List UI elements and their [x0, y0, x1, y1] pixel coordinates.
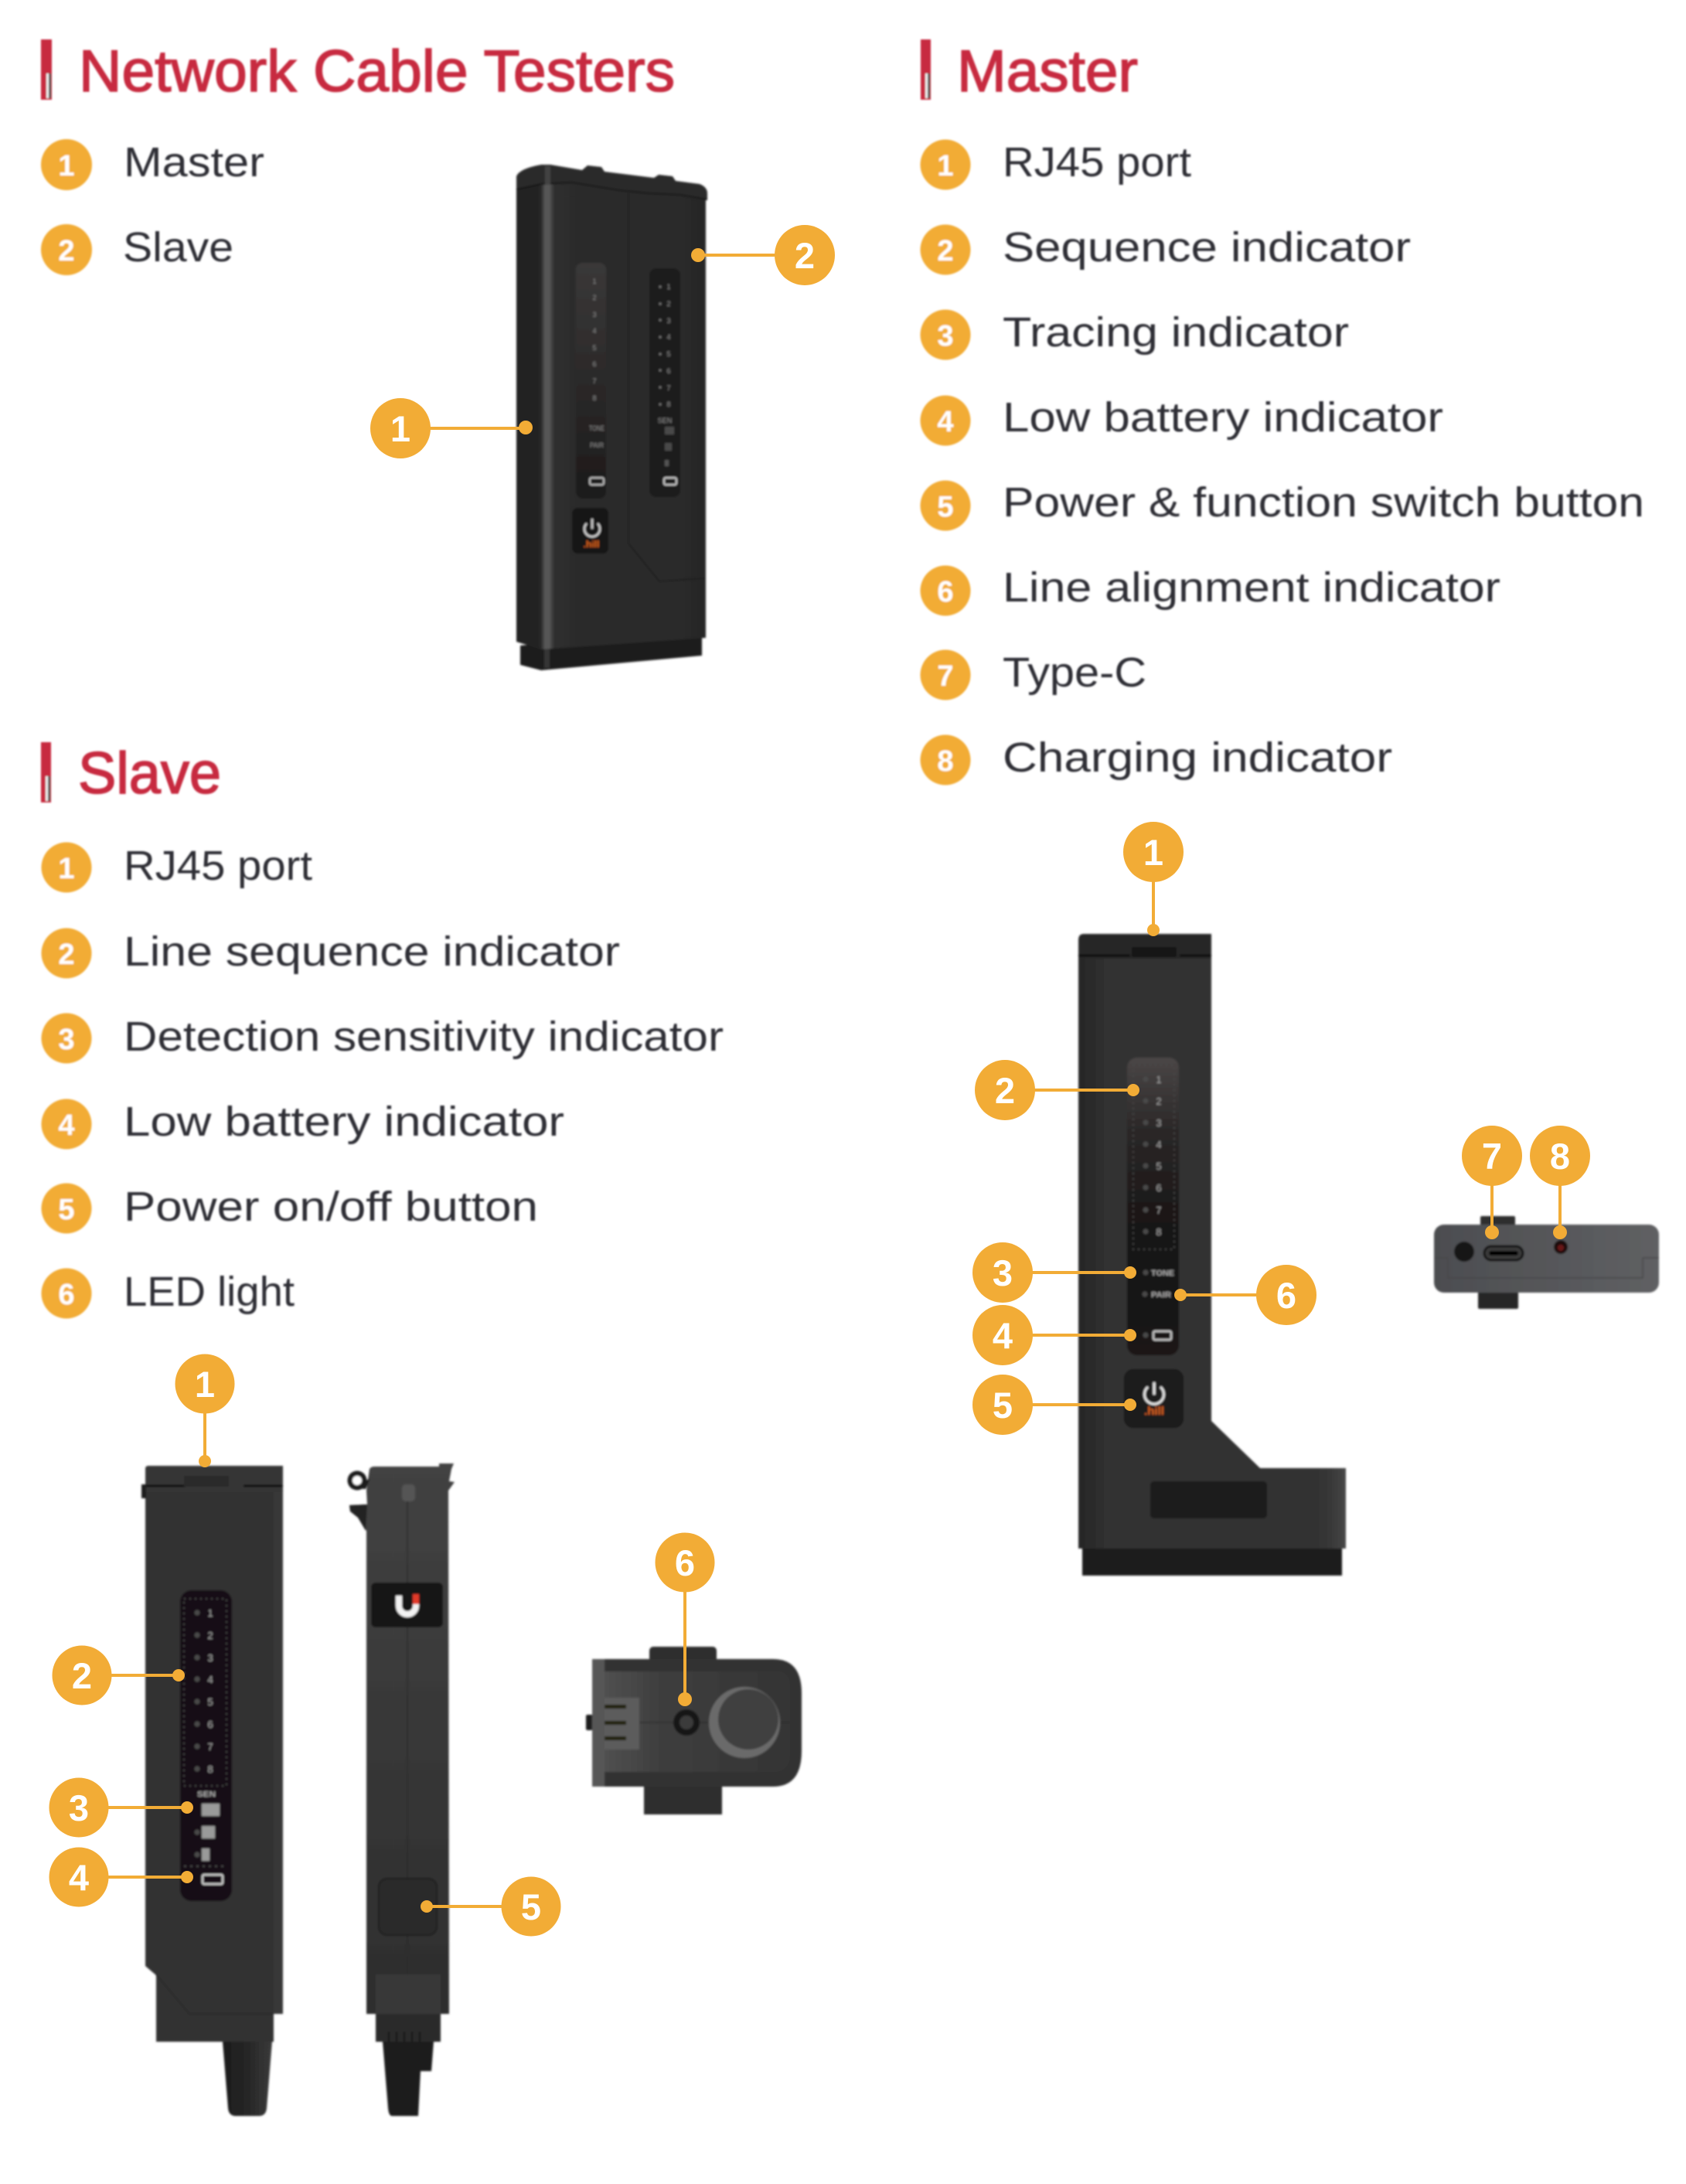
display: slave indicators: 3 — [666, 317, 671, 325]
callout: master 1 RJ45 port: 1 — [1143, 832, 1163, 873]
list: master parts: 4 — [937, 406, 954, 438]
list: slave parts: Power on/off button — [124, 1184, 538, 1230]
callout: master 3 tracing indicator: 3 — [993, 1252, 1013, 1293]
display: slave indicators: 1 — [207, 1607, 213, 1619]
callout: master 5 power button — [972, 1375, 1136, 1435]
display: master indicators: PAIR — [590, 441, 604, 449]
callout: master 6 line alignment indicator: 6 — [1276, 1275, 1296, 1316]
list: master parts: 8 — [937, 745, 954, 778]
display: line sequence panel: 8 — [1156, 1226, 1162, 1238]
display: slave indicators: 1 — [666, 283, 671, 291]
display: slave indicators: 6 — [207, 1719, 213, 1730]
callout: slave 6 LED light: 6 — [675, 1542, 695, 1583]
display: slave indicators: 2 — [207, 1630, 213, 1641]
display: line sequence panel: 2 — [1156, 1095, 1162, 1107]
heading: Master: Master — [957, 39, 1138, 104]
power and function button — [1125, 1370, 1183, 1427]
callout: 1 master on product: 1 — [390, 408, 410, 449]
device: master and slave docked together — [516, 165, 707, 670]
callout: slave 4 low battery indicator: 4 — [69, 1857, 89, 1898]
callout: master 4 low battery indicator: 4 — [993, 1315, 1013, 1356]
power button — [572, 508, 608, 554]
list: slave parts: 4 — [58, 1109, 75, 1142]
device: slave front view — [141, 1466, 283, 2116]
display: line sequence panel: 7 — [1156, 1204, 1162, 1216]
list: master parts: Power & function switch button — [1003, 479, 1644, 526]
list: product parts: 2 — [58, 235, 75, 267]
display: slave indicators: 8 — [666, 400, 671, 408]
callout: slave 3 detection sensitivity indicator — [49, 1778, 193, 1837]
callout: slave 1 RJ45 port — [175, 1354, 235, 1467]
list: slave parts: 2 — [58, 939, 75, 971]
list: slave parts: LED light — [124, 1269, 295, 1315]
list: master parts: Tracing indicator — [1003, 309, 1349, 356]
heading: Network Cable Testers: Network Cable Testers — [79, 39, 675, 104]
list: master parts: RJ45 port — [1003, 139, 1191, 186]
list: master parts: 3 — [937, 320, 954, 353]
callout: 2 slave on product: 2 — [795, 235, 815, 276]
device: slave side view — [348, 1463, 455, 2116]
display: line sequence panel: 6 — [1156, 1182, 1162, 1194]
display: slave indicators — [180, 1590, 232, 1901]
device: slave end view — [586, 1647, 802, 1814]
display: master indicators: TONE — [589, 424, 605, 432]
list: product parts: 1 — [58, 150, 75, 182]
list: product parts: Master — [124, 139, 264, 186]
list: master parts: 2 — [937, 235, 954, 267]
display: line sequence panel: 5 — [1156, 1160, 1162, 1172]
power and function button: .hill — [1144, 1405, 1164, 1418]
callout: slave 2 line sequence indicator: 2 — [72, 1655, 92, 1696]
display: master indicators: 5 — [592, 344, 597, 352]
list: master parts: Type-C — [1003, 649, 1146, 696]
device: master end view — [1434, 1216, 1659, 1309]
display: master indicators: 2 — [592, 294, 597, 302]
list: slave parts: Detection sensitivity indicator — [124, 1014, 724, 1060]
list: master parts: Sequence indicator — [1003, 224, 1411, 271]
display: line sequence panel: PAIR — [1151, 1291, 1172, 1300]
display: master indicators — [576, 263, 606, 499]
device: master front view — [1078, 934, 1346, 1576]
callout: master 6 line alignment indicator — [1174, 1265, 1316, 1325]
display: slave indicators: 6 — [666, 367, 671, 375]
callout: master 1 RJ45 port — [1123, 822, 1184, 936]
display: slave indicators — [649, 268, 680, 497]
list: master parts: 6 — [937, 576, 954, 608]
display: slave indicators: 5 — [207, 1696, 213, 1708]
display: slave indicators: 4 — [207, 1674, 213, 1685]
display: slave indicators: 4 — [666, 333, 671, 341]
heading: Slave: Slave — [78, 741, 221, 806]
display: master indicators: 6 — [592, 360, 597, 368]
callout: 2 slave on product — [691, 225, 835, 285]
callout: slave 4 low battery indicator — [49, 1848, 193, 1906]
display: master indicators: 7 — [592, 377, 597, 385]
list: master parts: 7 — [937, 660, 954, 693]
callout: slave 1 RJ45 port: 1 — [195, 1364, 215, 1405]
callout: slave 5 power button: 5 — [521, 1886, 541, 1927]
list: slave parts: 1 — [58, 853, 75, 885]
list: master parts: Line alignment indicator — [1003, 564, 1500, 611]
display: line sequence panel: 1 — [1156, 1074, 1162, 1085]
list: slave parts: Line sequence indicator — [124, 928, 620, 975]
list: slave parts: Low battery indicator — [124, 1099, 564, 1145]
display: slave indicators: SEN — [197, 1790, 216, 1799]
callout: 1 master on product — [370, 398, 533, 458]
display: line sequence panel: 4 — [1156, 1139, 1162, 1150]
display: slave indicators: 7 — [207, 1741, 213, 1753]
list: slave parts: RJ45 port — [124, 843, 312, 889]
list: slave parts — [42, 843, 724, 1319]
callout: master 2 sequence indicator: 2 — [995, 1070, 1015, 1111]
display: line sequence panel — [1127, 1058, 1179, 1355]
callout: master 4 low battery indicator — [972, 1305, 1136, 1365]
display: slave indicators: 8 — [207, 1763, 213, 1775]
display: line sequence panel: TONE — [1151, 1269, 1174, 1278]
callout: slave 5 power button — [421, 1877, 561, 1936]
display: master indicators: 4 — [592, 327, 597, 335]
callout: slave 3 detection sensitivity indicator: 3 — [69, 1787, 89, 1828]
list: slave parts: 3 — [58, 1024, 75, 1056]
display: slave indicators: 3 — [207, 1652, 213, 1664]
callout: slave 6 LED light — [656, 1532, 714, 1706]
callout: master 7 Type-C — [1462, 1126, 1522, 1239]
display: slave indicators: 2 — [666, 300, 671, 308]
list: slave parts: 6 — [58, 1279, 75, 1311]
list: master parts — [920, 139, 1644, 785]
callout: master 8 charging indicator: 8 — [1550, 1136, 1570, 1177]
display: master indicators: 8 — [592, 394, 597, 402]
list: product parts — [41, 139, 264, 275]
list: master parts: 5 — [937, 491, 954, 523]
callout: master 3 tracing indicator — [972, 1242, 1136, 1303]
display: master indicators: 1 — [592, 278, 597, 285]
list: master parts: 1 — [937, 150, 954, 182]
display: slave indicators: 5 — [666, 350, 671, 358]
callout: master 2 sequence indicator — [975, 1060, 1139, 1120]
callout: master 5 power button: 5 — [993, 1385, 1013, 1426]
callout: slave 2 line sequence indicator — [53, 1645, 185, 1705]
display: master indicators: 3 — [592, 311, 597, 319]
list: slave parts: 5 — [58, 1194, 75, 1226]
list: master parts: Charging indicator — [1003, 734, 1392, 781]
callout: master 7 Type-C: 7 — [1482, 1136, 1502, 1177]
callout: master 8 charging indicator — [1530, 1126, 1590, 1239]
power on/off button — [379, 1879, 437, 1935]
power button: .hill — [584, 539, 599, 550]
list: master parts: Low battery indicator — [1003, 394, 1443, 441]
logo badge — [371, 1583, 443, 1627]
display: slave indicators: SEN — [658, 417, 672, 424]
display: slave indicators: 7 — [666, 384, 671, 392]
display: line sequence panel: 3 — [1156, 1117, 1162, 1129]
list: product parts: Slave — [123, 224, 233, 271]
